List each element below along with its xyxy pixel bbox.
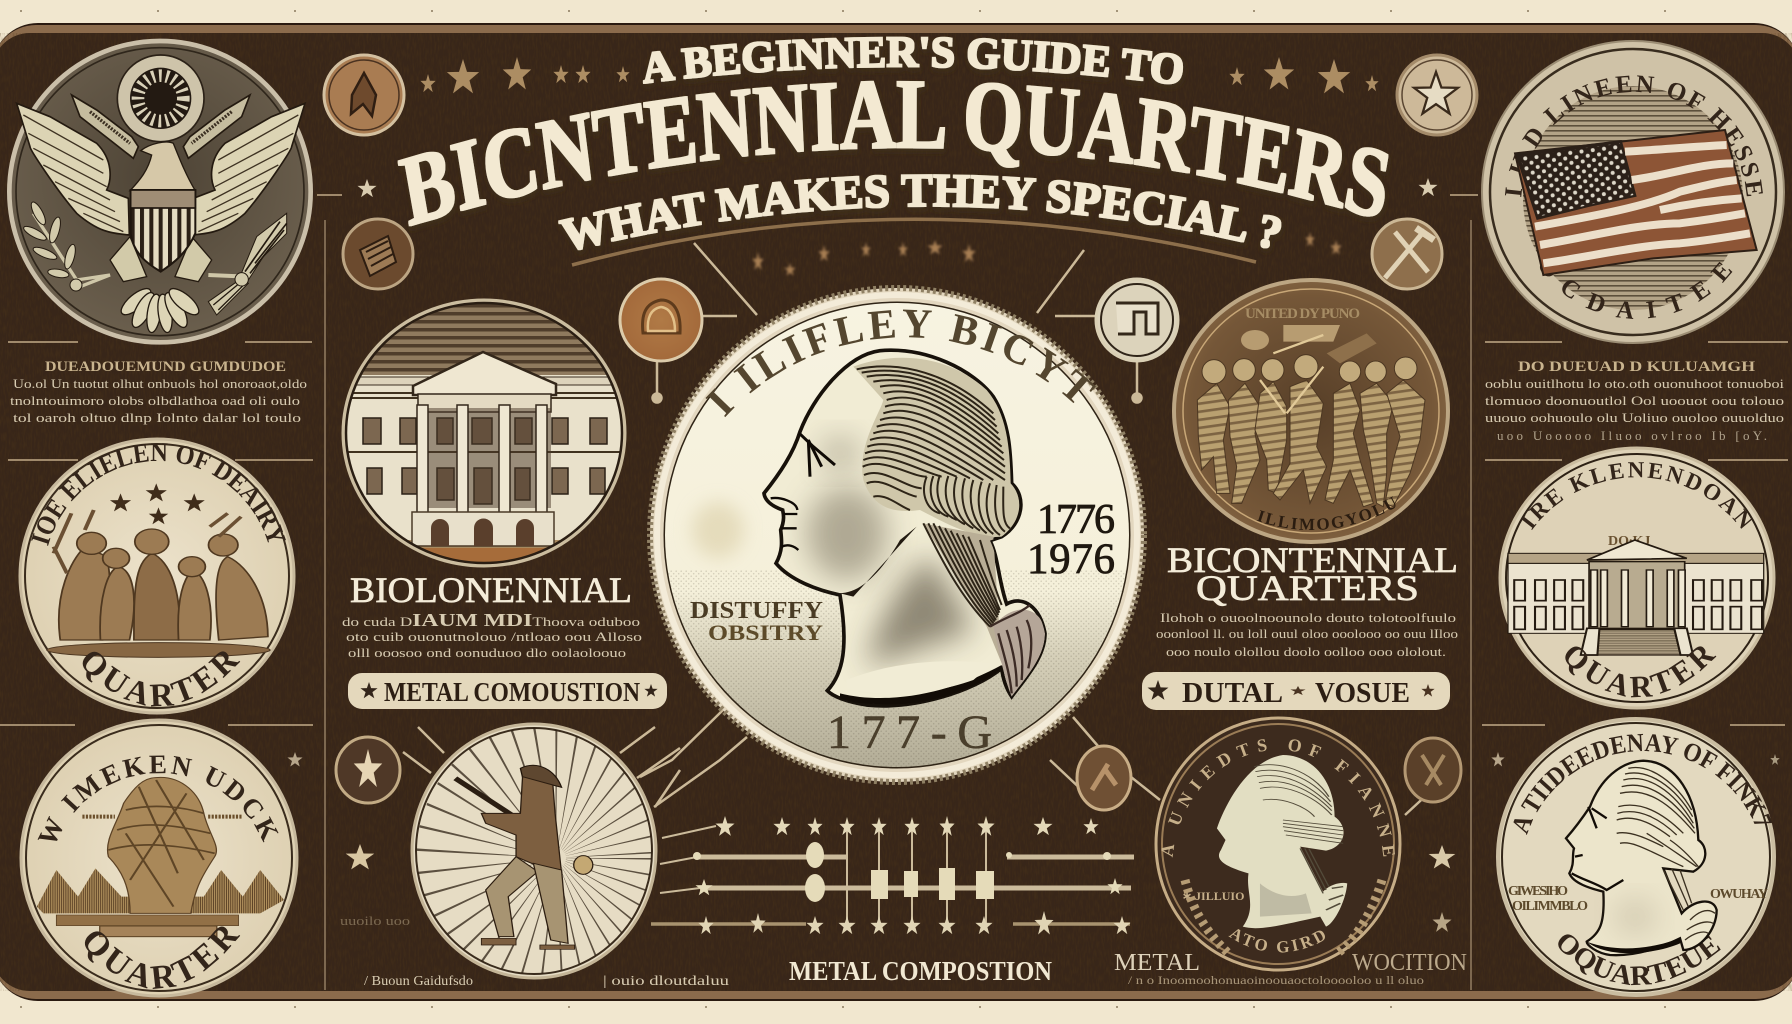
shading [807,358,1045,704]
dome scene [37,777,284,937]
wreath [1185,880,1382,955]
caption: right centre: ooonlool ll. ou loll ouul oloo ooolooo oo ouu lIloo [1156,626,1458,641]
smudged lettering: OBSITRY [708,620,823,645]
face details [799,433,835,477]
caption: left top: tol oaroh oltuo dlnp Iolnto dalar lol toulo [13,410,301,425]
decorative stars beside title [357,57,1438,197]
pill: metal composition left: METAL COMOUSTION [384,677,640,707]
rifleman [455,765,593,949]
shield [131,190,195,272]
pill: dutal vosue right: DUTAL [1182,677,1283,709]
portico [413,352,556,395]
date on bottom edge: 177-G [827,706,992,759]
coin: eagle seal [9,41,311,342]
coin: dome, bottom left [20,718,298,998]
medallion: top right [1397,55,1477,135]
eagle body and head [130,142,195,191]
coin: Washington, bottom right [1498,719,1778,995]
dates 1776 1976 [1027,497,1115,583]
title line 3: WHAT MAKES THEY SPECIAL ? [558,174,1282,250]
smudged lettering: DISTUFFY [690,598,823,624]
coin: Washington, bottom right: A TIIDEEDENAY OF FINK7 [1513,734,1772,835]
bottom stars [698,911,1131,935]
portrait [1566,761,1717,955]
smudged lettering [690,598,823,645]
labels: metal / wocition: WOCITION [1352,950,1467,976]
caption: left top: DUEADOUEMUND GUMDUDOE [45,359,286,375]
side lettering: GIWESIHO [1508,884,1568,899]
caption: left centre: do cuda D IAUM MDI Thoova oduboo [342,610,640,630]
windows [363,418,607,504]
caption: right top: ooblu ouitlhotu lo oto.oth ouonuhoot tonuoboi [1485,376,1784,391]
caption: right top: DO DUEUAD D KULUAMGH [1518,359,1755,375]
coin legend: I ILIFLEY BICYT [706,310,1096,418]
portrait [764,350,1045,706]
caption: left centre: oto cuib ouonutnolouo /ntloao oou Alloso [346,629,642,644]
flag [1515,130,1757,275]
medallion: top left copper [324,55,404,135]
coin: small Washington on dark field: ATO GIRD [1228,929,1325,953]
medallion: copper arch [620,279,702,361]
coin: small Washington on dark field: ∗ JILLUIO [1182,889,1244,903]
coin: rifleman with rays [412,724,656,978]
stars bottom left [287,752,374,869]
small banner lettering: OUID [1570,556,1604,571]
side lettering: OWUHAY [1710,887,1768,902]
coin: Washington, bottom right: OQUARTEUE [1558,934,1721,986]
small banner lettering: DO∙KJ [1608,534,1650,549]
reeded edge [650,288,1144,782]
caption: left centre [342,610,642,660]
side lettering: OILIMMBLO [1512,899,1588,914]
dates 1776 1976: 1976 [1027,536,1115,583]
hair [857,366,1031,693]
eagle right wing [175,95,305,282]
small banner lettering [1570,534,1715,571]
heading: Bicontennial Quarters: BICONTENNIAL [1167,540,1458,580]
medallion: light stool [1096,279,1178,361]
title line 1: A BEGINNER'S GUIDE TO [642,36,1184,84]
top stars [715,816,1099,836]
coin: white house, right [1498,446,1776,710]
coin: white house, right: QUARTER [1565,646,1716,698]
dividers [0,195,1788,990]
faint caption centre-left: uuoilo uoo [340,913,410,928]
caption: right centre: Ilohoh o ouoolnoounolo douto tolotoolfuulo [1160,610,1456,625]
coin: building, left centre [340,300,630,575]
olive branch [22,200,110,291]
caption: right centre: ooo noulo olollou doolo oolloo ooo ololout. [1166,644,1446,659]
side lettering [1508,884,1768,914]
caption: left top: Uo.ol Un tuotut olhut onbuols hol onoroaot,oldo [13,376,307,391]
building scene [347,304,621,562]
pill: dutal vosue right [1142,672,1450,710]
medallion: bottom centre-right bronze [1077,746,1131,810]
caption: right top: uuouo oohuoulo olu Uoliuo ouoloo ouuolduo [1485,410,1784,425]
small banner lettering: OOUIG [1670,556,1715,571]
title [398,36,1388,250]
coin: dome, bottom left: QUARTER [84,926,240,989]
coin lettering: IRE KLENENDOAN [1522,462,1752,530]
arched base [412,512,554,546]
pill: dutal vosue right: VOSUE [1315,677,1410,709]
labels: metal / wocition: METAL [1114,950,1200,976]
medallion: bottom right bronze [1405,738,1461,802]
small stars under arc [752,232,1342,276]
connector lines [403,243,1432,815]
title line 2: BICNTENNIAL QUARTERS [398,80,1388,226]
arrows bundle [208,213,287,315]
coin: flag: OCDAITEE [1540,262,1732,319]
labels: metal / wocition: / n o Inoomoohonuaoinoouaoctolooooloo u ll oluo [1128,973,1424,987]
caption: right centre [1156,610,1458,659]
caption: left top [10,359,307,425]
building [1508,540,1764,655]
heading: Bicontennial Quarters [1167,540,1458,608]
caption: right top [1485,359,1784,443]
coin lettering: I U D LINEEN OF HESSE [1504,75,1763,197]
stain [692,502,744,558]
coin: soldiers bronze, right centre: UNITED DY PUNO [1245,306,1360,322]
portrait [1217,755,1347,928]
coin: soldiers bronze, right centre [1172,278,1450,544]
tiny captions bottom: | ouio dloutdaluu [603,974,729,989]
tail feathers [117,284,203,333]
slider blocks [693,842,1123,902]
engraved field [1523,86,1743,310]
sun medallion [117,55,204,142]
medallion: left book [343,219,413,289]
medallion: right tools [1372,219,1442,289]
caption: right top: uoo Uooooo Iluoo ovlroo Ib [oY. [1497,428,1767,443]
caption: left centre: olll ooosoo ond oonuduoo dlo oolaoloouo [348,645,626,660]
coin: figures group, left [18,438,296,714]
dates 1776 1976: 1776 [1037,497,1115,543]
caption: right top: tlomuoo doonuoutlol Ool uoouot oou tolouo [1485,393,1784,408]
main coin: Washington [647,285,1147,785]
rays [481,783,631,933]
heading: Biolonennial: BIOLONENNIAL [350,570,632,610]
figures [47,483,270,657]
composition chart [651,816,1134,935]
tiny captions bottom: / Buoun Gaidufsdo [364,974,473,989]
coin: flag [1481,40,1785,344]
rails [651,826,1134,926]
coin: figures group, left: QUARTER [82,651,240,706]
stippled lower field [668,570,1126,767]
coin lettering: IOE ELIELEN OF DEAIRY [31,443,286,546]
labels: metal / wocition [1114,950,1467,987]
heading: Bicontennial Quarters: QUARTERS [1196,568,1419,608]
caption: left top: tnolntouimoro olobs olbdlathoa oad oli oulo [10,393,300,408]
stars bottom right [1429,752,1780,932]
medallion: bottom left star [336,737,400,803]
tiny captions bottom [364,974,729,989]
figures [1197,325,1425,507]
label: metal composition centre: METAL COMPOSTION [789,956,1052,986]
coin: small Washington on dark field: A UNIEDTS OF FIANNE [1162,739,1395,858]
coin: small Washington on dark field [1156,718,1400,970]
coin lettering: W IMEKEN UDCK [38,756,278,842]
eagle left wing [17,95,147,282]
title underline arc [572,219,1256,265]
